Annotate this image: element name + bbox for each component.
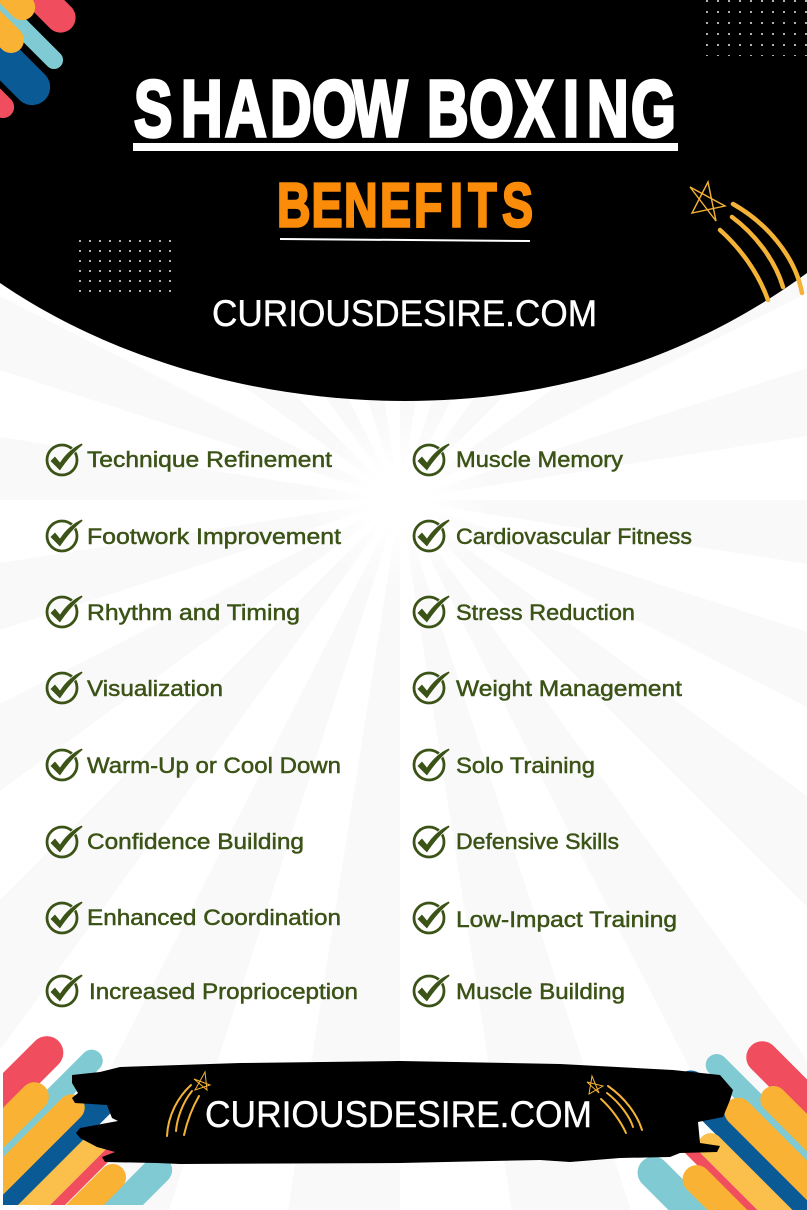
item: Warm-Up or Cool Down — [47, 748, 341, 780]
icon: shooting star bottom left — [167, 1072, 210, 1136]
item: Low-Impact Training — [414, 901, 677, 933]
item: Technique Refinement — [47, 443, 333, 475]
item: Cardiovascular Fitness: Cardiovascular Fitness — [456, 524, 692, 549]
item: Defensive Skills: Defensive Skills — [456, 829, 619, 854]
item: Warm-Up or Cool Down: Warm-Up or Cool Down — [87, 753, 341, 778]
header black curved panel — [0, 0, 807, 401]
benefits list: left column — [47, 443, 358, 1006]
item: Visualization: Visualization — [87, 676, 223, 701]
item: Low-Impact Training: Low-Impact Training — [456, 907, 677, 932]
item: Rhythm and Timing: Rhythm and Timing — [87, 600, 300, 625]
title: SHADOW BOXING — [134, 64, 676, 153]
item: Technique Refinement: Technique Refinement — [87, 447, 333, 472]
item: Solo Training — [414, 748, 595, 780]
item: Visualization — [47, 671, 223, 703]
subtitle: BENEFITS — [277, 170, 533, 240]
item: Increased Proprioception — [47, 974, 358, 1006]
item: Rhythm and Timing — [47, 595, 300, 627]
top-left colored bars — [0, 0, 76, 118]
item: Footwork Improvement — [47, 519, 342, 551]
item: Muscle Memory — [414, 443, 624, 475]
item: Increased Proprioception: Increased Proprioception — [89, 979, 358, 1004]
benefits list: right column — [414, 443, 692, 1006]
dot grid top right — [706, 0, 807, 56]
item: Stress Reduction — [414, 595, 635, 627]
item: Confidence Building — [47, 825, 304, 857]
item: Weight Management: Weight Management — [456, 676, 683, 701]
item: Enhanced Coordination — [47, 901, 341, 933]
item: Stress Reduction: Stress Reduction — [456, 600, 635, 625]
bottom-right colored bars — [638, 1041, 807, 1210]
item: Solo Training: Solo Training — [456, 753, 595, 778]
item: Footwork Improvement: Footwork Improvement — [87, 524, 342, 549]
item: Weight Management — [414, 671, 683, 703]
website url banner: CURIOUSDESIRE.COM — [205, 1094, 592, 1135]
item: Enhanced Coordination: Enhanced Coordination — [87, 905, 341, 930]
icon: shooting star top right — [690, 182, 802, 300]
item: Defensive Skills — [414, 825, 619, 857]
icon: shooting star bottom right — [587, 1076, 642, 1133]
dot grid left — [79, 240, 173, 292]
title underline — [133, 143, 678, 151]
bottom black brush banner — [72, 1061, 733, 1164]
item: Cardiovascular Fitness — [414, 519, 692, 551]
bottom-left colored bars — [3, 1036, 172, 1205]
item: Confidence Building: Confidence Building — [87, 829, 304, 854]
website url header: CURIOUSDESIRE.COM — [212, 293, 597, 334]
item: Muscle Memory: Muscle Memory — [456, 447, 624, 472]
item: Muscle Building: Muscle Building — [456, 979, 625, 1004]
subtitle underline — [280, 238, 530, 242]
item: Muscle Building — [414, 974, 625, 1006]
